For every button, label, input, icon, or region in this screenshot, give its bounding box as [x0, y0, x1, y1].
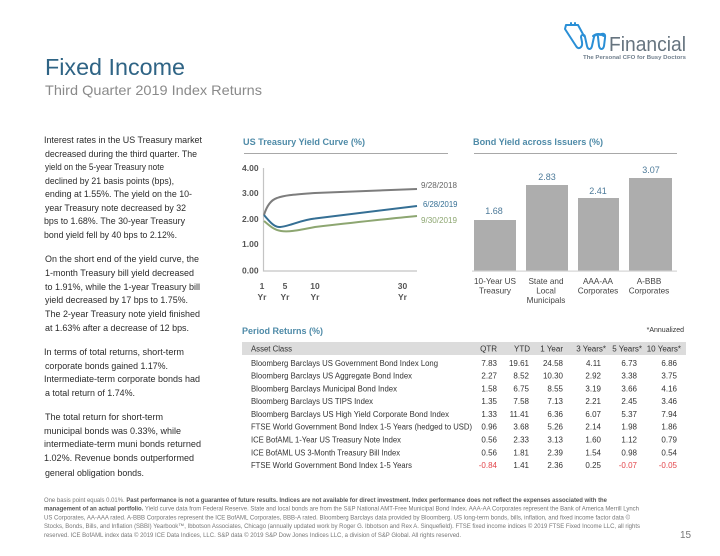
table rows: 4.16	[661, 384, 678, 394]
table rows: 1.81	[513, 448, 530, 458]
table header: 1 Year	[540, 344, 563, 354]
table rows: 8.52	[513, 372, 530, 380]
table rows: FTSE World Government Bond Index 1-5 Years	[251, 461, 412, 470]
table header: 3 Years*	[576, 344, 606, 354]
bar: AAA-AA Corporates: 2.41	[589, 186, 607, 196]
paragraph: treasury yields: bond yield fell by 40 bps to 2.12%.	[44, 230, 177, 240]
table header: 5 Years*	[612, 344, 642, 354]
bar: A-BBB Corporates: A-BBB	[637, 277, 662, 286]
bar: A-BBB Corporates	[629, 165, 672, 296]
series: 9/30/2019: 9/30/2019	[421, 216, 457, 225]
panel: bond yield across issuers	[472, 137, 677, 305]
table rows: Bloomberg Barclays US Aggregate Bond Index	[251, 372, 412, 380]
table rows: 7.83	[481, 359, 498, 368]
table rows: 6.86	[661, 359, 678, 368]
table rows: 0.56	[481, 448, 498, 458]
table rows: 1.58	[481, 384, 498, 394]
bar: 10-Year US Treasury	[474, 206, 517, 296]
paragraph: treasury yields: bps to 1.68%. The 30-year Treasury	[44, 216, 185, 226]
table rows: 3.19	[585, 384, 602, 394]
paragraph: municipal bonds: 1.02%. Revenue bonds outperformed	[44, 453, 194, 463]
table rows: 24.58	[543, 359, 564, 368]
table rows: 2.21	[585, 397, 602, 406]
footnote disclosures	[44, 497, 640, 539]
paragraph: corporate bonds: a total return of 1.74%.	[45, 388, 135, 398]
paragraph: municipal bonds: intermediate-term muni bonds returned	[44, 439, 201, 449]
paragraph: municipal bonds	[44, 412, 201, 478]
table rows: 3.46	[661, 397, 678, 406]
y axis labels	[242, 163, 259, 276]
table rows: Bloomberg Barclays US TIPS Index	[251, 397, 373, 406]
line chart	[242, 163, 458, 302]
table rows: -0.07	[619, 461, 638, 470]
bar: State and Local Municipals: Municipals	[527, 296, 565, 305]
paragraph: corporate bonds: In terms of total returns, short-term	[44, 347, 184, 357]
x axis labels: 1	[260, 281, 265, 291]
table rows: 1.33	[481, 410, 498, 419]
x axis labels: Yr	[258, 292, 267, 302]
table rows: 2.39	[547, 448, 564, 458]
table rows: 1.41	[513, 461, 530, 470]
table rows: FTSE World Government Bond Index 1-5 Years (hedged to USD)	[251, 422, 472, 432]
table rows: 1.12	[621, 436, 638, 444]
footnote disclosures: Stocks, Bonds, Bills, and Inflation (SBBI) Yearbook™, Ibbotson Associates, Chicago (annually updated work by Roger G. Ibbotson and Rex A. Sinquefield). FTSE fixed income indices © 2019 FTSE Fixed Income LLC, all rights	[44, 523, 640, 530]
table rows: 2.27	[481, 372, 498, 380]
logo: YMD Financial	[565, 23, 686, 61]
table rows: 0.96	[481, 422, 498, 432]
table rows: 4.11	[586, 359, 602, 368]
bar: State and Local Municipals	[526, 172, 568, 305]
bar: 10-Year US Treasury: Treasury	[479, 286, 512, 296]
paragraph: treasury yields: yield on the 5-year Treasury note	[45, 162, 164, 172]
series: 6/28/2019: 6/28/2019	[423, 200, 458, 209]
table rows: 2.92	[585, 372, 602, 380]
y axis labels: 0.00	[242, 266, 259, 276]
x axis labels	[258, 281, 408, 302]
table rows: 6.07	[585, 410, 602, 419]
table rows	[251, 359, 678, 470]
paragraph: corporate bonds: Intermediate-term corporate bonds had	[44, 374, 200, 384]
table rows: 0.98	[621, 448, 638, 458]
heading: Period Returns (%)	[242, 326, 323, 336]
paragraph: corporate bonds: corporate bonds gained 1.17%.	[45, 361, 168, 371]
y axis labels: 2.00	[242, 214, 259, 224]
paragraph: short end of curve: On the short end of the yield curve, the	[45, 254, 199, 264]
bar: AAA-AA Corporates	[578, 186, 619, 296]
table rows: 3.68	[513, 422, 530, 432]
x axis labels: Yr	[311, 292, 320, 302]
table rows: 7.13	[547, 397, 564, 406]
table header: Asset Class	[251, 344, 292, 354]
table rows: 1.54	[585, 448, 602, 458]
table rows: 7.58	[513, 397, 530, 406]
table rows: 1.35	[481, 397, 498, 406]
heading: Bond Yield across Issuers (%)	[473, 137, 603, 147]
tagline: The Personal CFO for Busy Doctors	[583, 55, 686, 61]
paragraph: municipal bonds: The total return for short-term	[45, 412, 163, 422]
paragraph: short end of curve: at 1.63% after a decrease of 12 bps.	[45, 323, 189, 333]
paragraph: short end of curve: to 1.91%, while the 1-year Treasury bill	[45, 282, 200, 292]
footnote disclosures: One basis point equals 0.01%. Past performance is not a guarantee of future results. Indices are not available for direct investment. Index performance does not reflect the expenses associated with the	[44, 497, 608, 504]
bar: AAA-AA Corporates: AAA-AA	[583, 277, 614, 286]
table header: 10 Years*	[647, 344, 681, 354]
series: 9/30/2019	[264, 216, 457, 231]
page number: 15	[680, 530, 692, 541]
table rows: 6.73	[621, 359, 638, 368]
text block: market commentary	[44, 135, 202, 478]
table rows: 0.25	[585, 461, 602, 470]
table rows: 3.75	[661, 372, 678, 380]
table rows: 3.66	[621, 384, 638, 394]
table rows: 5.26	[547, 422, 564, 432]
paragraph: treasury yields: declined by 21 basis points (bps),	[45, 176, 174, 186]
paragraph: treasury yields: year Treasury note decreased by 32	[45, 203, 186, 213]
table rows: 3.38	[621, 372, 638, 380]
table rows: -0.05	[659, 461, 678, 470]
paragraph: short end of curve: The 2-year Treasury note yield finished	[45, 309, 200, 319]
table rows: Bloomberg Barclays Municipal Bond Index	[251, 384, 397, 394]
icon: stethoscope and tooth	[565, 23, 605, 49]
table rows: 5.37	[621, 410, 638, 419]
bar: A-BBB Corporates: Corporates	[629, 286, 669, 296]
bar chart	[472, 165, 677, 305]
table rows: 6.75	[513, 384, 530, 394]
y axis labels: 4.00	[242, 163, 259, 173]
table rows: 0.56	[481, 436, 498, 444]
heading: US Treasury Yield Curve (%)	[243, 137, 365, 147]
title: Fixed Income	[45, 54, 185, 80]
table rows: -0.84	[479, 461, 498, 470]
x axis labels: 5	[283, 281, 288, 291]
bar: A-BBB Corporates: 3.07	[642, 165, 660, 175]
y axis labels: 1.00	[242, 239, 259, 249]
wordmark: Financial	[609, 34, 686, 56]
bar: 10-Year US Treasury: 10-Year US	[474, 277, 517, 286]
table rows: Bloomberg Barclays US High Yield Corporate Bond Index	[251, 410, 449, 419]
bar: State and Local Municipals: Local	[536, 286, 556, 296]
paragraph: short end of curve: yield decreased by 17 bps to 1.75%.	[45, 295, 188, 305]
subtitle: Third Quarter 2019 Index Returns	[45, 82, 262, 98]
table rows: 0.54	[661, 448, 678, 458]
table rows: Bloomberg Barclays US Government Bond Index Long	[251, 359, 438, 368]
paragraph: corporate bonds	[44, 347, 200, 398]
series: 6/28/2019	[264, 200, 458, 227]
bar: AAA-AA Corporates: Corporates	[578, 286, 618, 296]
table rows: 1.98	[621, 422, 638, 432]
footnote disclosures: reserved. ICE BofAML index data © 2019 ICE Data Indices, LLC. S&P data © 2019 S&P Dow Jones Indices LLC, a division of S&P Global. All rights reserved.	[44, 532, 461, 539]
table header: YTD	[514, 344, 530, 354]
paragraph: treasury yields: ending at 1.55%. The yield on the 10-	[45, 189, 192, 199]
table rows: 1.60	[585, 436, 602, 444]
x axis labels: Yr	[398, 292, 408, 302]
table rows: 2.45	[621, 397, 638, 406]
series: 9/28/2018: 9/28/2018	[421, 181, 457, 190]
bar: State and Local Municipals: State and	[528, 277, 564, 286]
table rows: 10.30	[543, 372, 564, 380]
x axis labels: 10	[310, 281, 320, 291]
table header: QTR	[480, 344, 497, 354]
table rows: 19.61	[509, 359, 530, 368]
table rows: 11.41	[510, 410, 530, 419]
table rows: 2.33	[513, 436, 530, 444]
panel: period returns table	[242, 326, 686, 470]
paragraph: short end of curve	[45, 254, 200, 333]
table rows: 3.13	[547, 436, 564, 444]
table rows: 6.36	[547, 410, 564, 419]
panel: US Treasury yield curve	[242, 137, 458, 302]
table rows: ICE BofAML 1-Year US Treasury Note Index	[251, 436, 401, 444]
annualized note: *Annualized	[647, 327, 684, 334]
table rows: 0.79	[661, 436, 678, 444]
paragraph: treasury yields: Interest rates in the US Treasury market	[44, 135, 202, 145]
table rows: 2.36	[547, 461, 564, 470]
table rows: 7.94	[661, 410, 678, 419]
x axis labels: 30	[398, 281, 407, 291]
footnote disclosures: US Corporates, AA-AAA rated. A-BBB Corporates represent the ICE BofAML Corporates, BBB-A rated. Bloomberg Barclays data provided by Bloomberg. US long-term bonds, bills, inflation, and fixed income factor data ©	[44, 514, 630, 521]
paragraph: short end of curve: 1-month Treasury bill yield decreased	[45, 268, 194, 278]
table header	[242, 342, 686, 355]
bar: State and Local Municipals: 2.83	[538, 172, 556, 182]
paragraph: treasury yields: decreased during the third quarter. The	[45, 149, 197, 159]
table rows: ICE BofAML US 3-Month Treasury Bill Index	[251, 448, 400, 458]
series: 9/28/2018	[264, 181, 457, 215]
x axis labels: Yr	[281, 292, 290, 302]
bar: 10-Year US Treasury: 1.68	[485, 206, 503, 216]
paragraph: treasury yields	[44, 135, 202, 240]
table rows: 2.14	[585, 422, 602, 432]
table rows: 8.55	[547, 384, 564, 394]
paragraph: municipal bonds: municipal bonds was 0.33%, while	[44, 426, 181, 436]
paragraph: municipal bonds: general obligation bonds.	[45, 468, 144, 478]
y axis labels: 3.00	[242, 188, 259, 198]
footnote disclosures: management of an actual portfolio. Yield curve data from Federal Reserve. State and local bonds are from the S&P National AMT-Free Municipal Bond Index. AAA-AA Corporates represent the Bank of America Merrill Lynch	[44, 506, 640, 513]
table rows: 1.86	[661, 422, 678, 432]
